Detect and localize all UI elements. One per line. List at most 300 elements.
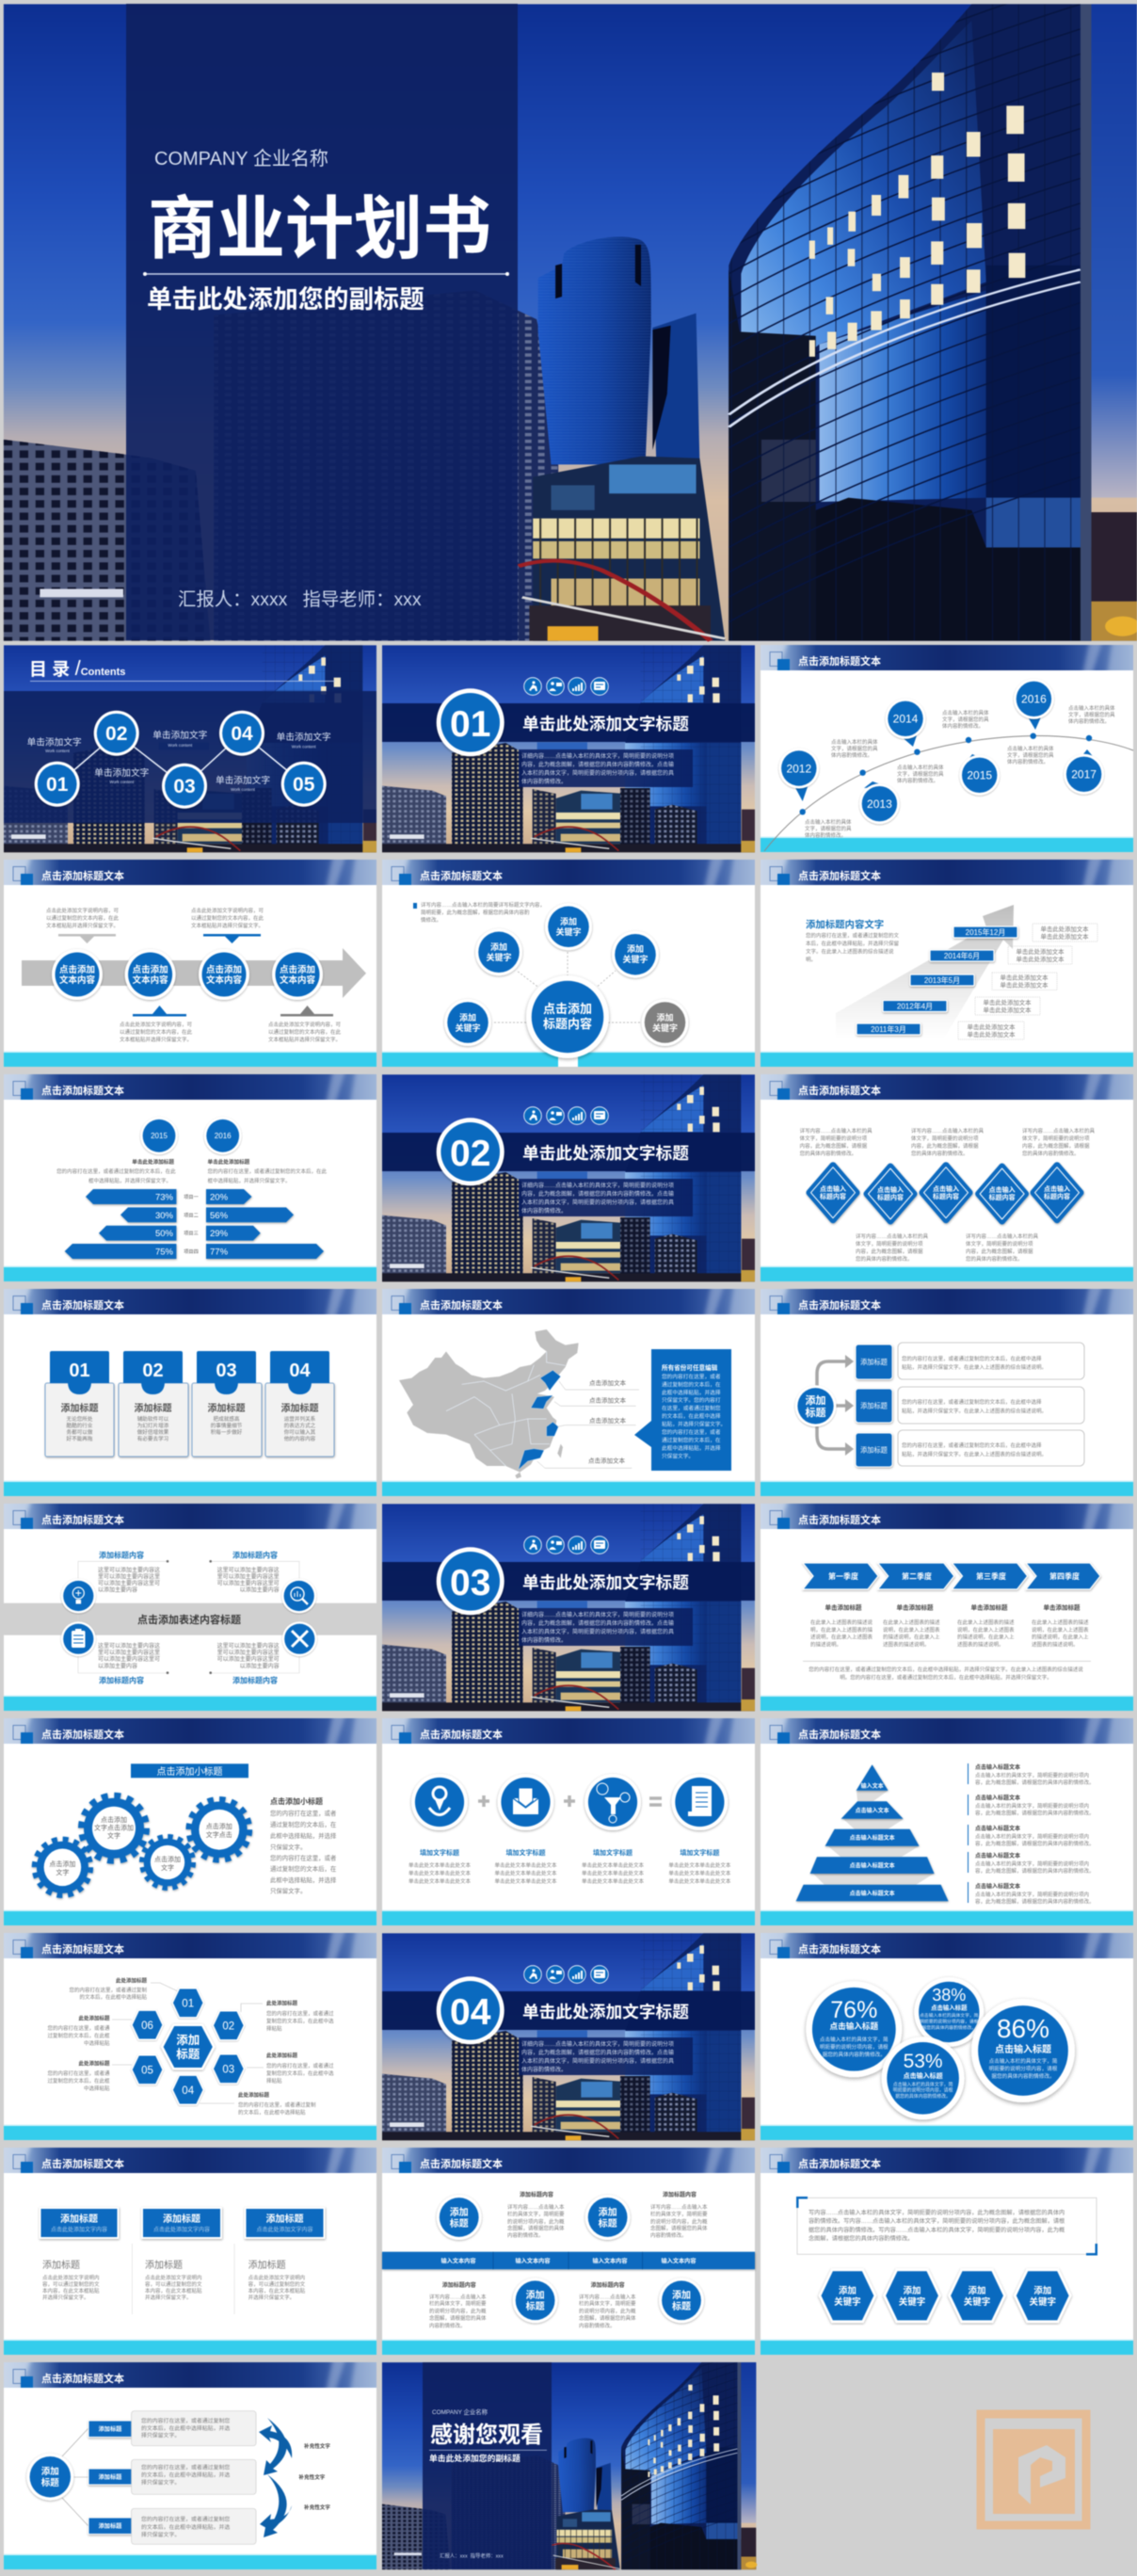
timeline notes: 文字，请根据您的具 [897,770,944,778]
bottom notes: 念图解，请根据您的具体 [579,2314,636,2322]
curve [764,735,1133,851]
gears [35,1796,248,1895]
pointers [58,934,333,1017]
column 2: 容，可以通过复制您的文 [145,2280,202,2288]
branch boxes: 您的内容打在这里，或者通过复制您 [141,2516,230,2523]
bottom circles: 添加 [672,2289,691,2301]
top circles: 添加 [450,2206,469,2218]
slide title: 点击添加标题文本 [420,1298,503,1312]
slide: three boxes [0,2142,382,2355]
section description [519,1179,693,1216]
column headings: 单击添加标题 [1043,1602,1081,1612]
side notes: 点击输入标题文本 [975,1763,1020,1771]
label: right 2: 您的内容打在这里，或者通过 [266,2062,334,2069]
center band [382,2252,755,2269]
top notes: 内容酌情修改。 [650,2231,687,2239]
keyword hexagons: 关键字 [964,2296,990,2308]
keyword circles: 添加 [459,1012,476,1022]
bubble 38%: 38% [932,1986,966,2004]
bubble 76%: 点击输入本栏的具体文字，简 [820,2036,889,2043]
keyword hexagons: 关键字 [1029,2296,1056,2308]
column text: 在此录入上述图表的描述 [883,1618,940,1626]
section number [437,1547,504,1615]
bottom circles: 标题 [526,2300,545,2312]
hexagons: 01 [182,1998,194,2009]
bubble 53%: 点击输入本栏的具体文字，简 [893,2081,953,2088]
text boxes: 您的内容打在这里，或者通过复制您的文本后，在此框中选择 [902,1355,1042,1362]
column text [56,1167,328,1184]
bubble 53%: 53% [904,2051,943,2072]
node labels: 单击添加文字 [152,729,207,741]
slide: text frame and keywords [755,2142,1137,2355]
label: right 2: 此处添加标题 [266,2052,298,2059]
map labels [588,1378,627,1465]
icon: envelope [497,1774,553,1830]
column text: 的描述说明。 [810,1641,841,1649]
title rule [143,272,509,276]
step notes: 点击此处添加文字说明内容，可 [268,1021,342,1028]
bottom notes: 栏的具体文字，简明扼要 [579,2300,636,2308]
tree lines [62,2428,88,2526]
column headings: 单击添加标题 [971,1602,1008,1612]
column 3: 并选择只保留文字。 [248,2294,295,2301]
card 02: 有必要去学习 [137,1435,168,1442]
frame dots [167,1560,212,1674]
gray band [4,1603,376,1635]
list headings [99,1550,278,1685]
keyword hexagons: 添加 [968,2285,986,2296]
column 2: 本内容，在此文本框粘贴 [145,2287,202,2294]
right bars [206,1189,324,1259]
date pills: 2013年5月 [924,975,960,985]
frame lines [78,1561,299,1673]
list headings: 添加标题内容 [99,1550,144,1559]
label: top left [69,1977,147,2001]
body text: 本后，在此框中选择粘贴，并选择只保留 [806,940,900,947]
column text: 您的内容打在这里，或者通过复制您的文本后，在此 [56,1167,176,1175]
label: right 1: 此处添加标题 [266,2000,298,2007]
dashed connectors [492,951,641,1022]
bubble 86%: 明扼要的说明分项内容，请根 [989,2065,1058,2072]
branch boxes: 的文本后，在此框中选择粘贴，并选 [141,2424,230,2432]
column text: 单击此处文本单击此处文本 [668,1877,731,1885]
bubble 38%: 明扼要的说明分项内容，请根 [920,2019,979,2024]
side notes [975,1763,1095,1906]
column text: 在此录入上述图表的描述说 [810,1618,873,1626]
card 03: 把成就感高 [214,1415,240,1423]
callout text: 的文本后，在此框中选择 [662,1412,721,1420]
keyword circles: 添加 [490,942,507,952]
slide: section 03 [382,1504,755,1711]
top paragraphs: 详写内容……点击输入本栏的具 [1022,1127,1096,1135]
bar labels: 项目二 [184,1212,199,1218]
slide title: 点击添加标题文本 [41,869,124,882]
timeline notes: 文字，请根据您的具 [942,716,989,723]
section icons [524,1107,608,1124]
hexagons: 04 [182,2085,195,2097]
side notes: 容，此为概念图解，请根据您的具体内容酌情修改。 [975,1840,1095,1847]
bubble 76%: 点击输入标题 [830,2021,878,2031]
rising arrow [836,905,1014,1038]
timeline notes: 点击输入本栏的具体 [897,764,944,771]
diamond row: 标题内容 [1044,1192,1070,1200]
bubble 38% [914,1977,984,2047]
arrow labels [298,2442,330,2511]
slide: hub and keywords [376,854,761,1067]
operator: plus [564,1795,575,1807]
map labels: 点击添加文本 [589,1395,627,1405]
column 1: 并选择只保留文字。 [42,2294,89,2301]
year circles: 2015 [151,1132,168,1140]
root circle: 标题 [41,2477,59,2488]
card 02: 辅助软件可以 [137,1415,169,1423]
diamond row: 标题内容 [820,1192,846,1200]
column text [408,1861,731,1885]
slide: branching flow [755,1283,1137,1496]
top notes: 念图解，请根据您的具体 [507,2225,565,2232]
node labels: 单击添加文字 [277,731,331,743]
title boxes: 添加标题 [60,2213,98,2225]
year balloons: 2013 [867,797,892,811]
thank-you subtitle: 单击此处添加您的副标题 [429,2453,520,2463]
title boxes: 点击此处添加文字内容 [51,2226,107,2233]
slide title: 点击添加标题文本 [798,1084,881,1097]
icon: funnel [585,1774,641,1830]
company name: COMPANY 企业名称 [154,148,328,169]
section description: 内容，此为概念图解，请根据您的具体内容酌情修改。点击输 [521,761,674,768]
column text [810,1618,1089,1649]
bubble 76% [806,1981,902,2077]
watermark stamp [981,2414,1086,2525]
column text: 在此录入上述图表的描述 [1032,1618,1089,1626]
timeline notes: 文字，请根据您的具 [831,745,878,752]
summary text: 明。您的内容打在这里，或者通过复制您的文本后，在此框中选择粘贴，并选择只保留文字。 [840,1674,1052,1682]
column text: 单击此处文本单击此处文本 [582,1861,644,1869]
keyword circles: 关键字 [622,954,649,964]
hexagons: 标题 [176,2047,200,2061]
dashed note boxes [958,924,1097,1039]
slide title: 点击添加标题文本 [420,869,503,882]
chevrons: 第四季度 [1049,1571,1080,1581]
pyramid layers [796,1764,949,1901]
curved arrows [259,2418,292,2537]
list text: 以添加主要内容 [240,1663,280,1670]
column text: 述图表的描述说明。 [883,1641,930,1649]
card 04: 你可以输入其 [284,1428,316,1436]
date pills: 2012年4月 [897,1002,933,1011]
column text: 单击此处文本单击此处文本 [494,1861,557,1869]
step notes: 以通过复制您的文本内容，在此 [191,914,264,922]
dashed note boxes: 单击此处添加文本 [967,1022,1016,1031]
company name: COMPANY 企业名称 [432,2407,488,2416]
slide: diamonds [755,1069,1137,1281]
bubble 53%: 明扼要的说明分项内容，请根 [893,2087,953,2094]
callout panel [634,1349,731,1471]
thank-you panel [423,2362,552,2569]
card 02 [119,1351,188,1457]
card 03: 03 [216,1360,237,1381]
timeline notes: 体内容酌情修改。 [1007,758,1049,765]
center circle [794,1385,836,1426]
root circle [26,2454,73,2501]
bar labels [184,1194,199,1255]
timeline notes: 文字，请根据您的具 [1007,751,1054,759]
side text: 通过复制您的文本后，在 [270,1864,336,1873]
keyword circles: 添加 [656,1012,674,1022]
top notes: 详写内容……点击输入本 [650,2203,708,2211]
step notes: 点击此处添加文字说明内容，可 [191,907,264,914]
diamond row: 点击输入 [820,1184,846,1193]
column headings: 单击此处添加标题 [207,1158,250,1166]
bottom notes: 添加标题内容 [591,2281,625,2289]
list text: 里可以添加主要内容这里 [98,1572,160,1580]
column text: 单击此处文本单击此处文本 [582,1877,644,1885]
section number: 03 [450,1563,490,1603]
column text: 单击此处文本单击此处文本 [668,1870,731,1877]
section description [519,1608,693,1646]
section icons [524,1537,608,1554]
card 02: 做好倍增效果 [137,1428,169,1436]
bottom notes: 内容酌情修改。 [579,2322,616,2329]
note: 情修改。 [421,916,441,924]
left bars [65,1189,176,1259]
column text: 框中选择粘贴，并选择只保留文字。 [88,1177,171,1184]
step circles [52,949,323,1000]
label: top left: 的文本后，在此框中选择粘贴 [79,1993,147,2001]
list text: 里可以添加主要内容这里 [217,1649,280,1656]
cover dark panel [126,4,518,640]
section description [519,749,693,787]
label: left 2: 此处添加标题 [78,2060,110,2068]
chevrons: 第一季度 [828,1571,858,1581]
step notes: 文本框粘贴并选择只保留文字。 [120,1036,192,1043]
list text: 里可以添加主要内容这里 [98,1649,160,1656]
card 01: 好不能再拖 [67,1435,93,1442]
heading rule [30,680,335,683]
callout text: 此框中选择粘贴，并选择 [662,1389,721,1396]
bubble 86%: 据您的具体内容酌情修改。 [991,2072,1055,2080]
year balloons: 2016 [1021,693,1047,706]
keyword hexagons [818,2268,1072,2323]
pyramid labels: 点击输入标题文本 [850,1890,895,1897]
bubble 53% [882,2037,965,2119]
section description: 详细内容……点击输入本栏的具体文字，简明扼要的说明分项 [521,1182,674,1189]
timeline notes: 点击输入本栏的具体 [1007,745,1054,752]
bottom notes: 添加标题内容 [442,2281,476,2289]
column 1: 添加标题 [42,2259,80,2271]
column text: 说明，在此录入上述图表 [1032,1626,1089,1634]
pyramid labels: 点击输入标题文本 [850,1834,895,1842]
subtitle box: 点击添加小标题 [156,1765,222,1778]
step circles: 文本内容 [133,974,168,986]
pyramid labels: 点击输入文本 [856,1807,889,1814]
callout text: 此框中选择粘贴，并选择 [662,1444,721,1452]
column headings: 单击添加标题 [825,1602,862,1612]
text boxes: 粘贴，并选择只保留文字。在此录入上述图表的综合描述说明。 [902,1407,1047,1414]
numbered nodes: 05 [293,774,315,796]
step notes: 以通过复制您的文本内容，在此 [268,1028,342,1036]
bar values: 77% [210,1247,229,1258]
column 3 [248,2259,306,2301]
top paragraphs: 体文字，简明扼要的说明分项 [911,1135,979,1142]
contents heading: 目 录 /Contents [29,656,125,680]
column text: 的描述说明，在此录入上 [883,1634,940,1641]
slide title: 点击添加标题文本 [41,2372,124,2385]
label blocks: 添加标题 [860,1358,888,1366]
column text: 单击此处文本单击此处文本 [494,1870,557,1877]
gear labels: 点击添加 [154,1855,181,1863]
side notes: 点击输入标题文本 [975,1883,1020,1891]
side notes: 点击输入标题文本 [975,1852,1020,1860]
column text: 框中选择粘贴，并选择只保留文字。 [207,1177,291,1184]
connector lines [112,1983,264,2103]
column text: 单击此处文本单击此处文本 [668,1861,731,1869]
column headings: 填加文字标题 [593,1848,633,1857]
diamond row: 点击输入 [989,1185,1016,1194]
section number [437,1118,504,1185]
slide: pyramid [755,1713,1137,1925]
label: top left: 您的内容打在这里，或者通过复制 [69,1987,147,1994]
section background [382,1933,755,2140]
side notes: 点击输入本栏的具体文字，简明扼要的说明分项内 [975,1772,1089,1779]
section icons [524,1966,608,1983]
top notes: 栏的具体文字，简明扼要 [507,2211,565,2218]
curve dots [800,733,1092,815]
step notes: 文本框粘贴并选择只保留文字。 [268,1036,341,1043]
top notes: 详写内容……点击输入本 [507,2203,565,2211]
pyramid shadows [813,1791,934,1885]
side notes: 容，此为概念图解，请根据您的具体内容酌情修改。 [975,1810,1095,1817]
text boxes: 您的内容打在这里，或者通过复制您的文本后，在此框中选择 [902,1441,1042,1449]
diamond row: 标题内容 [877,1193,904,1201]
arrow labels: 补充性文字 [304,2504,330,2511]
slide: China map [376,1283,761,1496]
column text: 明，在此录入上述图表的描 [810,1626,873,1634]
slide title: 点击添加标题文本 [798,1298,881,1312]
cover slide [4,0,1137,641]
bubble 53%: 据您的具体内容酌情修改。 [895,2093,951,2100]
callout text: 只保留文字。 [662,1452,694,1459]
top notes: 内容酌情修改。 [507,2231,544,2239]
timeline notes: 文字，请根据您的具 [1068,711,1115,718]
top paragraphs: 体文字，简明扼要的说明分项 [800,1135,868,1142]
section number [437,688,504,756]
bubble 86%: 点击输入本栏的具体文字，简 [989,2057,1058,2065]
list text: 这里可以添加主要内容这 [217,1567,280,1574]
section description: 体内容酌情修改。 [521,778,567,785]
bar values: 50% [155,1229,174,1239]
operator: plus [478,1795,489,1807]
section background [382,1074,755,1281]
bubble 38%: 据您的具体内容酌情修改。 [922,2024,976,2031]
bar values: 30% [155,1211,174,1221]
list text: 以添加主要内容 [98,1663,137,1670]
label: bottom [238,2091,316,2116]
top notes: 的说明分项内容，此为概 [650,2217,708,2225]
note: 简明扼要，此为概念图解，根据您的具体内容酌 [421,909,530,916]
bottom notes: 栏的具体文字，简明扼要 [429,2300,487,2308]
center circle: 添加 [806,1393,826,1407]
dashed note boxes: 单击此处添加文本 [1000,981,1049,989]
frame text: 念图解，请根据您的具体内容酌情修改。 [809,2235,913,2243]
top paragraphs: 您的具体内容酌情修改。 [1022,1150,1080,1157]
label blocks: 添加标题 [860,1401,888,1410]
slide: butterfly bar chart [0,1069,382,1281]
section title: 单击此处添加文字标题 [522,2002,689,2021]
side notes: 点击输入本栏的具体文字，简明扼要的说明分项内 [975,1891,1089,1898]
top notes [507,2191,708,2239]
operator: equals [649,1798,662,1805]
column 3: 添加标题 [248,2259,286,2271]
branch boxes: 的文本后，在此框中选择粘贴，并选 [141,2523,230,2531]
chevrons: 第二季度 [902,1571,932,1581]
diamond row: 点击输入 [1044,1184,1070,1193]
frame text: 容酌情修改。写内容……点击输入本栏的具体文字，简明扼要的说明分项内容，此为概念图解，请根 [809,2217,1065,2225]
slide: section 04 [382,1933,755,2140]
bottom circles: 标题 [672,2300,691,2312]
section number: 04 [450,1992,491,2033]
callout text [662,1363,726,1459]
section description: 内容，此为概念图解，请根据您的具体内容酌情修改。点击输 [521,1619,674,1627]
slide: four cards [0,1283,382,1496]
note: 详写内容……点击输入本栏的简要详写标题文字内容， [421,901,545,909]
column text: 单击此处文本单击此处文本 [494,1877,557,1885]
bottom notes: 的说明分项内容，此为概 [429,2307,487,2314]
step circles: 文本内容 [59,974,95,986]
callout text: 所有省份可任意编辑 [662,1363,718,1372]
column text: 单击此处文本单击此处文本 [582,1870,644,1877]
dashed note boxes: 单击此处添加文本 [983,1006,1032,1014]
label: left 1: 此处添加标题 [78,2015,110,2022]
list text: 可以添加主要内容这里可 [217,1655,280,1663]
dashed note boxes: 单击此处添加文本 [1016,947,1065,956]
top circles: 添加 [599,2206,617,2218]
column 1: 容，可以通过复制您的文 [42,2280,100,2288]
column 1 [42,2259,100,2301]
slide: quarterly chevrons [755,1498,1137,1711]
callout text: 通过复制您的文本后，在 [662,1380,721,1388]
column headings: 填加文字标题 [680,1848,719,1857]
side notes: 点击输入本栏的具体文字，简明扼要的说明分项内 [975,1802,1089,1810]
bar values: 73% [155,1192,174,1203]
column text: 单击此处文本单击此处文本 [408,1870,471,1877]
section background [382,1504,755,1711]
keyword circles: 关键字 [652,1022,678,1033]
presenter line: 汇报人：xxx 指导老师：xxx [440,2552,504,2559]
slide: stepped dates [755,854,1137,1067]
card 04: 添加标题 [280,1402,318,1414]
diamond row: 标题内容 [989,1193,1016,1201]
diamond row: 点击输入 [933,1184,959,1193]
diamond row: 标题内容 [933,1192,959,1200]
date pills: 2011年3月 [871,1024,906,1034]
title boxes: 添加标题 [163,2213,200,2225]
slide title: 点击添加标题文本 [41,1513,124,1526]
step circles: 文本内容 [280,974,315,986]
title boxes: 添加标题 [265,2213,303,2225]
top circles: 标题 [450,2217,469,2230]
top notes: 念图解，请根据您的具体 [650,2225,708,2232]
gear labels: 文字 [107,1831,120,1840]
slide title: 点击添加标题文本 [420,2157,503,2170]
slide: band timeline [376,2142,761,2355]
hexagons [131,1988,245,2105]
node labels: 单击添加文字 [27,736,82,748]
gear labels: 文字 [56,1868,69,1876]
subtitle box [131,1763,248,1778]
side notes: 点击输入标题文本 [975,1825,1020,1832]
year balloons: 2015 [967,768,992,781]
